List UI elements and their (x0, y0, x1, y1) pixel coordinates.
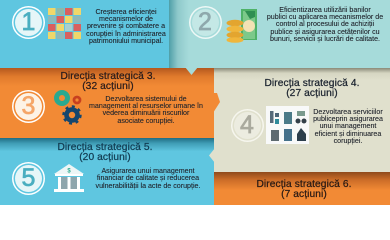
panel: direction 1 (0, 0, 172, 68)
icon: bank building (54, 164, 84, 192)
text: direction 3 description: vederea diminuării riscurilor (103, 109, 189, 117)
pointer: beige arrow left (209, 149, 214, 162)
text: direction 4 description: corupției. (334, 137, 362, 145)
icon: colored tile grid (48, 8, 81, 39)
panel: direction 3 (0, 68, 214, 138)
heading: direction 4: Direcția strategică 4. (264, 78, 360, 88)
number badge 2: 2 (198, 8, 212, 36)
text: direction 2 description: control al procesului de achiziții (276, 20, 374, 28)
number badge 4 (234, 112, 260, 138)
text: direction 3 description (89, 94, 203, 125)
icon: three gears (54, 90, 82, 125)
panel: direction 6 (214, 172, 390, 205)
pointer: teal arrow down (186, 68, 198, 75)
text: direction 1 description: prevenire și combatere a (87, 22, 165, 30)
heading: direction 3: Direcția strategică 3. (60, 70, 156, 82)
text: direction 1 description: corupției în administrarea (86, 30, 166, 38)
heading: direction 6: Direcția strategică 6. (256, 178, 352, 190)
heading: direction 5 (57, 142, 153, 163)
number badge 5 (15, 164, 42, 192)
heading: direction 3 (60, 70, 156, 92)
heading: direction 5: Direcția strategică 5. (57, 142, 153, 152)
heading: direction 6 (256, 178, 352, 200)
text: direction 2 description: publici cu aplicarea mecanismelor de (267, 13, 383, 21)
number badge 3 (15, 92, 42, 120)
text: direction 1 description: Creșterea eficienței (95, 8, 157, 16)
text: direction 2 description: publice și asigurarea cetățenilor cu (270, 28, 380, 36)
panel: direction 5 (0, 138, 214, 205)
icon: bank building: $ (67, 168, 71, 174)
text: direction 4 description: publiceprin asigurarea (313, 115, 383, 123)
heading: direction 4 (264, 78, 360, 99)
heading: direction 6: (7 acțiuni) (281, 189, 327, 200)
text: direction 1 description (86, 8, 166, 45)
text: direction 3 description: management al resurselor umane în (89, 102, 203, 110)
heading: direction 5: (20 acțiuni) (79, 152, 131, 163)
text: direction 5 description: Asigurarea unui management (101, 167, 195, 175)
icon: coins and banknote (226, 9, 257, 43)
icon: white tile with building icons (266, 106, 309, 144)
text: direction 2 description: bunuri, servicii și lucrări de calitate. (270, 35, 380, 43)
pointer: orange arrow right (214, 93, 220, 112)
text: direction 1 description: patrimoniului municipal. (89, 37, 163, 45)
number badge 5: 5 (22, 164, 35, 192)
text: direction 4 description (313, 108, 383, 145)
text: direction 1 description: mecanismelor de (99, 15, 153, 23)
panel: direction 2 (169, 0, 390, 68)
text: direction 5 description (96, 167, 200, 190)
text: direction 2 description: Eficientizarea utilizării banilor (279, 6, 371, 14)
text: direction 2 description (267, 6, 383, 43)
heading: direction 3: (32 acțiuni) (82, 81, 134, 92)
text: direction 4 description: eficient și diminuarea (315, 130, 381, 138)
heading: direction 4: (27 acțiuni) (286, 88, 338, 99)
number badge 1 (15, 8, 42, 36)
text: direction 5 description: financiar de calitate și reducerea (97, 174, 199, 182)
text: direction 5 description: vulnerabilității la acte de corupție. (96, 182, 200, 190)
text: direction 3 description: Dezvoltarea sistemului de (105, 94, 187, 102)
number badge 1: 1 (22, 8, 35, 36)
number badge 3: 3 (22, 92, 35, 120)
number badge 2 (192, 9, 218, 36)
panel: direction 4 (214, 68, 390, 172)
text: direction 3 description: asociate corupției. (117, 117, 175, 125)
text: direction 4 description: unui management (320, 122, 376, 130)
number badge 4: 4 (240, 110, 254, 138)
text: direction 4 description: Dezvoltarea serviciilor (313, 108, 383, 116)
